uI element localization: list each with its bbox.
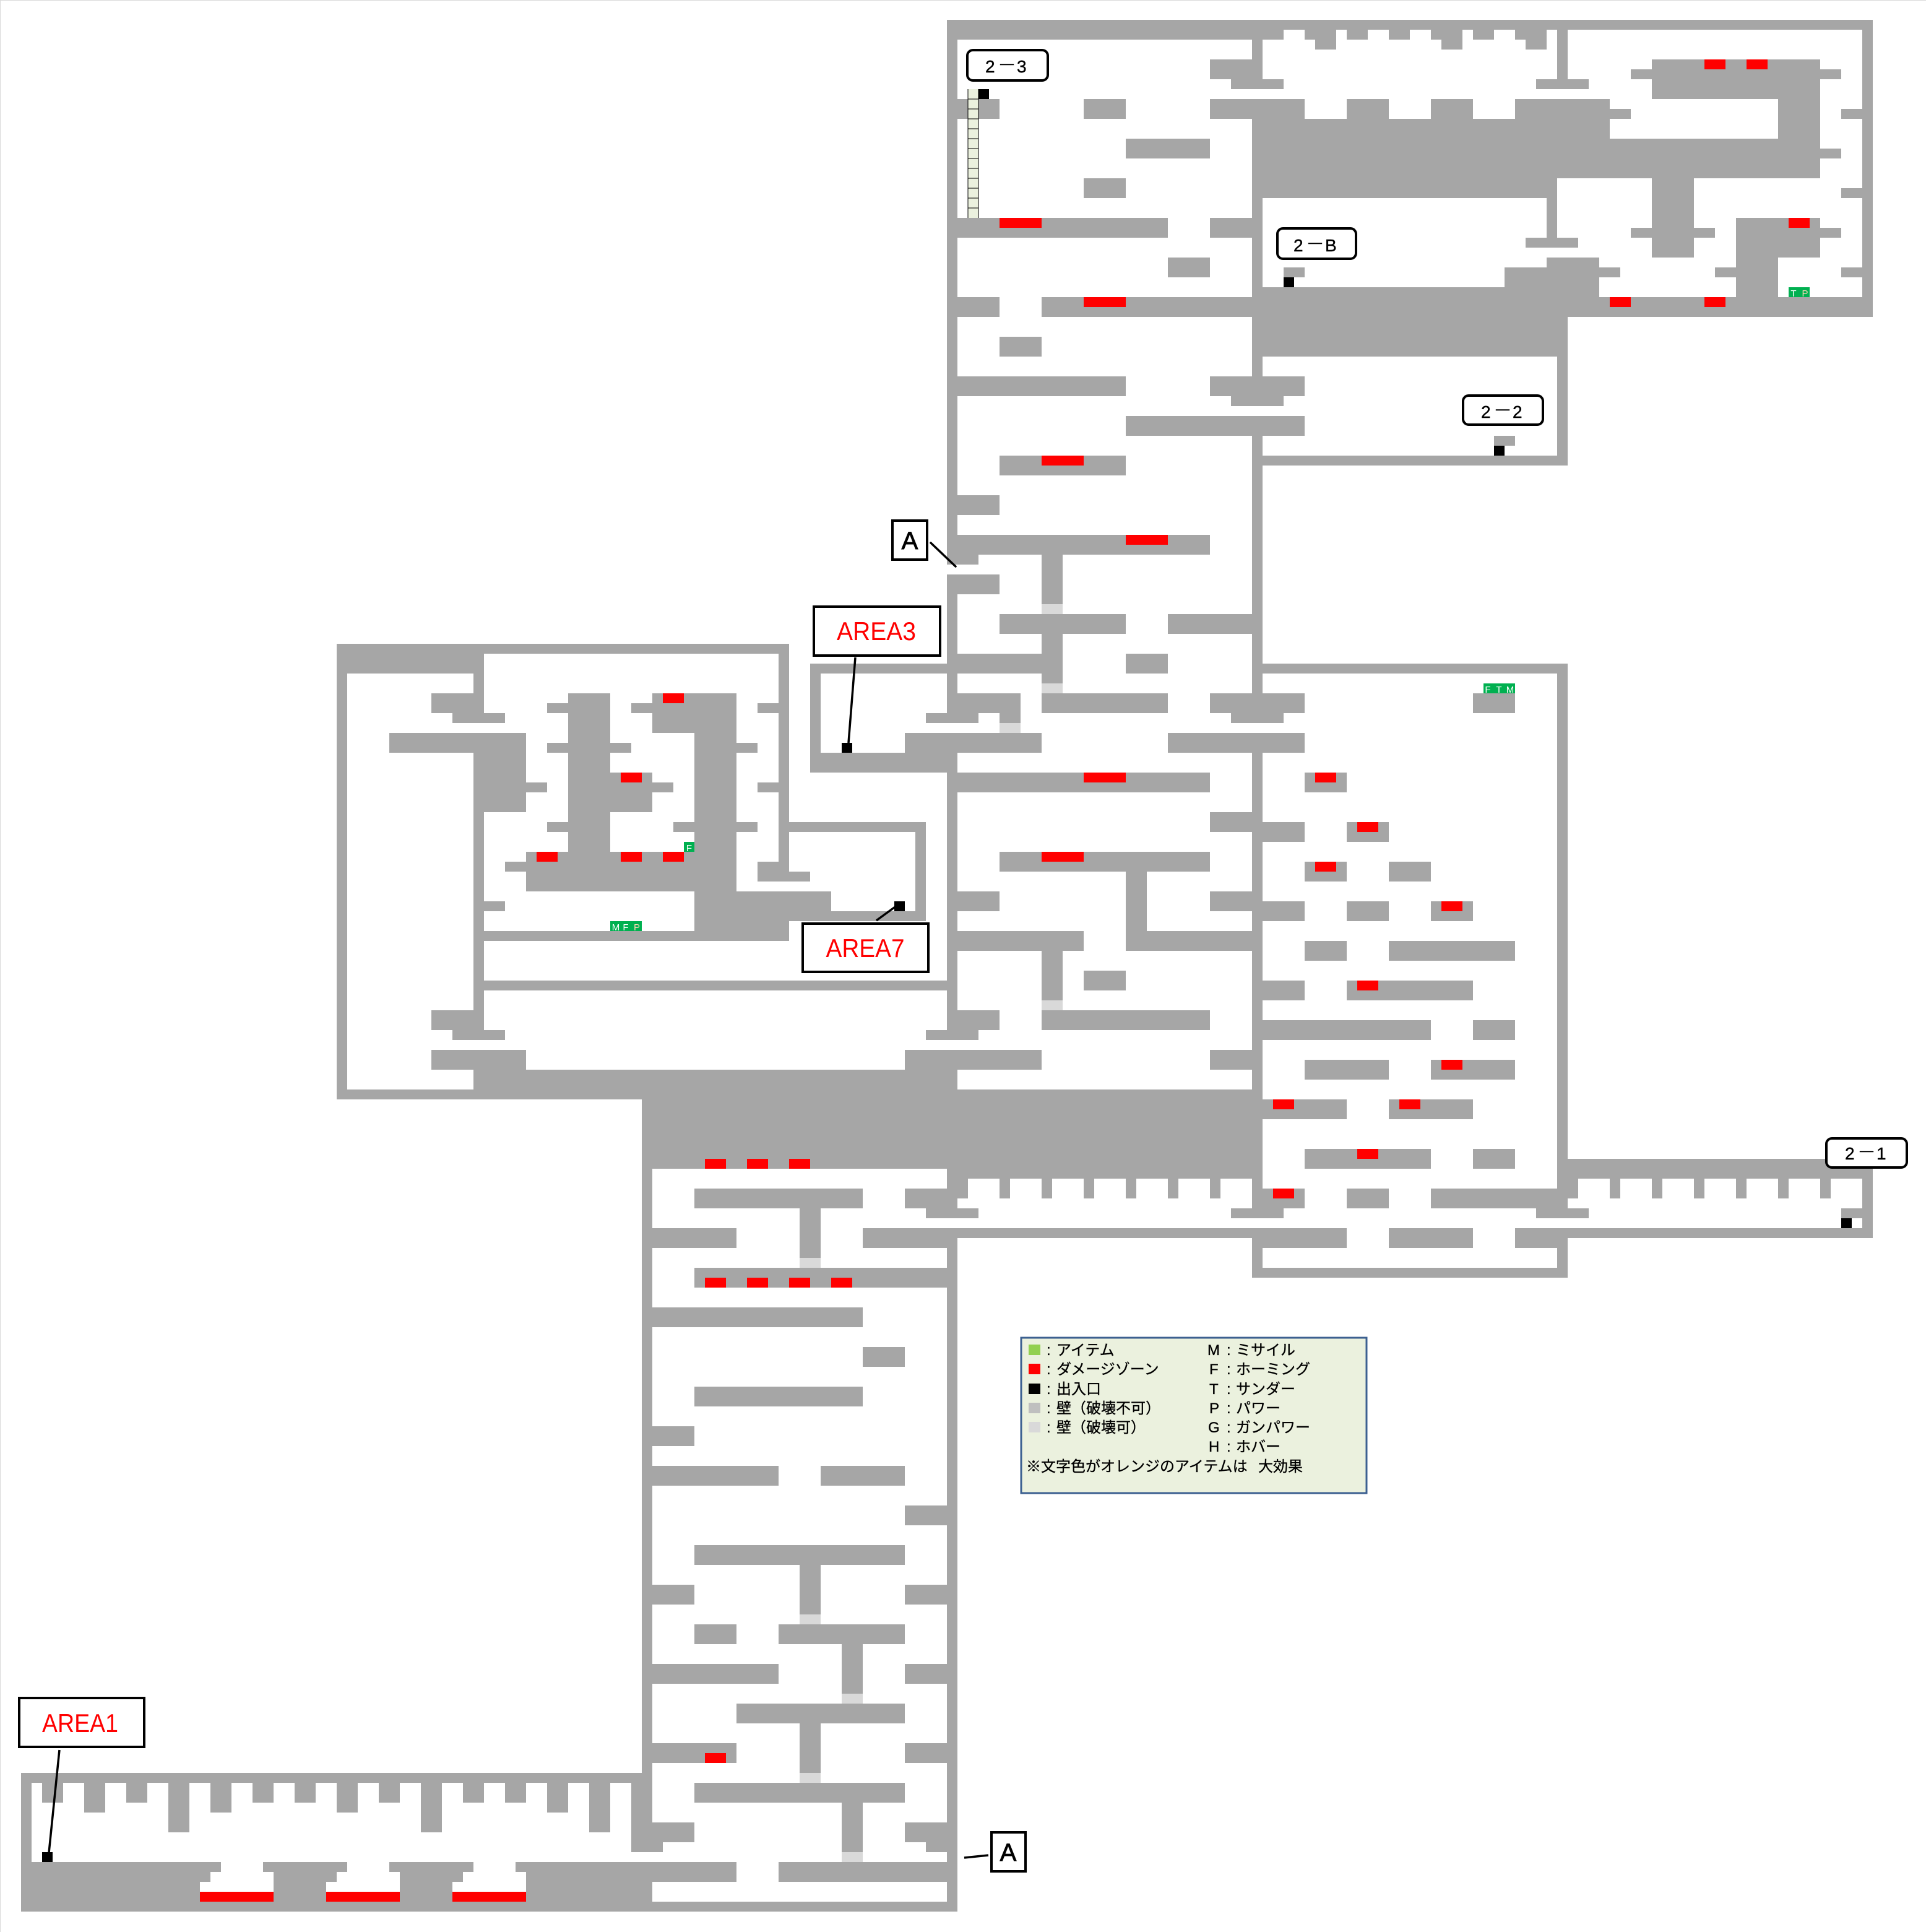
exit: 2-2 — [1494, 446, 1505, 456]
walls: right chamber — [863, 664, 1873, 1278]
panel: bottom corridor AREA1 — [21, 1773, 957, 1912]
label: 2-1: 1 — [1876, 1144, 1886, 1163]
walls: lower tower — [631, 1099, 957, 1912]
legend row: destructible wall: : — [1047, 1419, 1051, 1436]
label: A lower — [991, 1832, 1026, 1871]
item: T P: P — [1802, 288, 1808, 299]
item: F T M: T — [1496, 685, 1502, 695]
legend row: thunder: T — [1209, 1381, 1219, 1398]
legend row: indestructible wall: : — [1047, 1400, 1051, 1417]
walls: left complex — [337, 644, 947, 1099]
label: 2-2: 2 — [1513, 402, 1522, 422]
label: 2-3: — — [1000, 56, 1014, 71]
damage zones: central tower — [1000, 218, 1168, 862]
legend row: entrance — [1029, 1381, 1101, 1398]
label: AREA1 — [19, 1698, 144, 1747]
legend row: destructible wall: 壁（破壊可） — [1056, 1419, 1146, 1436]
label: AREA7 — [803, 924, 928, 972]
panel: 2-1 comb corridor — [337, 1070, 1873, 1238]
walls: right comb corridor — [1568, 1159, 1873, 1238]
legend row: gun power: G — [1208, 1419, 1220, 1436]
item: F T M: M — [1506, 685, 1514, 695]
panel: legend — [1021, 1338, 1367, 1493]
exit: 2-1 — [1841, 1218, 1852, 1228]
arrow: A upper leader — [931, 543, 956, 566]
label: 2-B: B — [1325, 236, 1337, 255]
legend row: power: パワー — [1236, 1400, 1280, 1417]
legend row: power — [1209, 1400, 1280, 1417]
breakable walls: central tower — [1000, 604, 1063, 1010]
walls: central comb and solid mass — [337, 1070, 1263, 1218]
legend row: thunder: サンダー — [1236, 1381, 1295, 1398]
legend row: missile — [1207, 1342, 1295, 1359]
legend row: missile: M — [1207, 1342, 1220, 1359]
label: 2-1 — [1826, 1138, 1907, 1167]
legend row: item: アイテム — [1056, 1342, 1115, 1359]
label: 2-2: — — [1496, 401, 1509, 417]
legend note: ※文字色がオレンジのアイテムは — [1026, 1458, 1248, 1475]
legend row: homing: F — [1209, 1361, 1219, 1378]
legend row: entrance: : — [1047, 1381, 1051, 1398]
legend row: indestructible wall: 壁（破壊不可） — [1056, 1400, 1160, 1417]
legend row: item: : — [1047, 1342, 1051, 1359]
legend row: item — [1029, 1342, 1115, 1359]
item: M F P: M — [612, 922, 620, 933]
item: M F P: P — [634, 922, 640, 933]
damage zones: left complex — [537, 693, 684, 862]
ladder — [968, 89, 989, 218]
item: F — [684, 842, 694, 854]
damage zones: right chamber — [1273, 773, 1462, 1198]
label: AREA3: AREA3 — [837, 617, 916, 646]
legend note: 大効果 — [1258, 1458, 1303, 1475]
item: M F P — [610, 921, 642, 933]
arrow: AREA7 leader — [876, 906, 897, 921]
item: T P — [1789, 287, 1810, 299]
panel: AREA3 room — [810, 664, 957, 773]
label: 2-1: — — [1860, 1143, 1873, 1158]
walls: AREA3 room — [810, 664, 957, 773]
label: A upper: A — [902, 527, 918, 555]
label: 2-B — [1277, 228, 1356, 259]
legend row: hover: ホバー — [1236, 1439, 1280, 1455]
legend row: homing: ホーミング — [1236, 1361, 1310, 1378]
legend row: missile: : — [1227, 1342, 1231, 1359]
legend row: gun power: ガンパワー — [1236, 1419, 1310, 1436]
walls: upper right chambers — [947, 20, 1873, 466]
label: 2-2 — [1463, 396, 1543, 425]
label: 2-3: 2 — [985, 57, 995, 76]
legend row: thunder: : — [1227, 1381, 1231, 1398]
label: A lower: A — [1000, 1839, 1017, 1866]
label: AREA7: AREA7 — [826, 934, 905, 963]
item: F: F — [686, 843, 692, 854]
panel: right chamber — [863, 664, 1873, 1278]
label: 2-B: 2 — [1293, 236, 1303, 255]
legend row: entrance: 出入口 — [1056, 1381, 1101, 1398]
walls: bottom corridor — [21, 1773, 957, 1912]
label: AREA1: AREA1 — [42, 1709, 118, 1738]
label: AREA3 — [814, 607, 940, 656]
label: 2-1: 2 — [1845, 1144, 1855, 1163]
legend row: gun power: : — [1227, 1419, 1231, 1436]
arrow: A lower leader — [964, 1855, 988, 1858]
damage zones: upper right chambers — [1610, 59, 1810, 307]
panel: central tower — [905, 20, 1305, 1278]
legend row: damage zone: ダメージゾーン — [1056, 1361, 1159, 1378]
item: F T M: F — [1485, 685, 1491, 695]
exit: AREA3 — [842, 743, 852, 753]
arrow: AREA3 leader — [849, 657, 855, 743]
legend row: homing: : — [1227, 1361, 1231, 1378]
exit: AREA7 — [894, 901, 905, 911]
exit: AREA1 — [42, 1852, 53, 1862]
legend row: hover — [1209, 1439, 1280, 1455]
label: 2-B: — — [1308, 235, 1322, 250]
panel: upper right chambers — [947, 20, 1873, 466]
label: 2-3: 3 — [1017, 57, 1027, 76]
item: F T M — [1483, 683, 1515, 695]
walls: central tower — [905, 20, 1305, 1278]
legend row: power: : — [1227, 1400, 1231, 1417]
panel: left complex — [337, 644, 947, 1099]
panel: lower tower — [631, 1099, 957, 1912]
label: A upper — [892, 521, 927, 560]
legend row: hover: H — [1209, 1439, 1219, 1455]
exit: 2-B — [1284, 277, 1294, 287]
arrow: AREA1 leader — [49, 1750, 59, 1853]
legend row: thunder — [1209, 1381, 1295, 1398]
label: 2-2: 2 — [1481, 402, 1491, 422]
legend row: damage zone: : — [1047, 1361, 1051, 1378]
damage zones: bottom pits — [200, 1892, 526, 1902]
breakable walls: lower tower — [800, 1258, 863, 1862]
damage zones: lower tower — [705, 1159, 852, 1763]
legend row: hover: : — [1227, 1439, 1231, 1455]
legend row: missile: ミサイル — [1236, 1342, 1295, 1359]
label: 2-3 — [967, 50, 1048, 80]
item: T P: T — [1790, 288, 1797, 299]
legend row: power: P — [1209, 1400, 1219, 1417]
item: M F P: F — [623, 922, 629, 933]
